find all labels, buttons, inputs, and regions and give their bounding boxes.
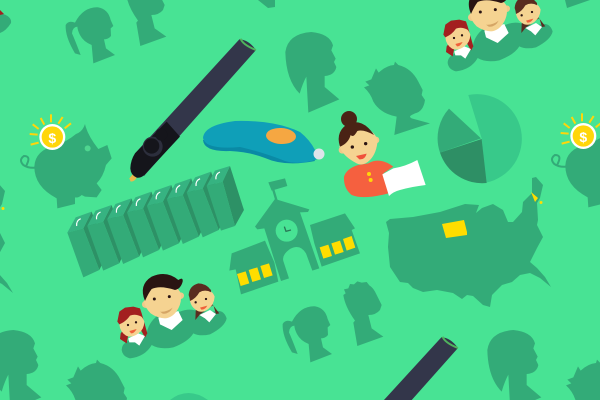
family: bottom [117, 274, 227, 358]
fragment: usa east coast left edge [0, 183, 13, 313]
right wing [310, 213, 360, 267]
silhouette: ponytail girl top [66, 7, 115, 63]
silhouette: bob woman bottom right [487, 330, 541, 400]
highlighted state [442, 220, 467, 238]
silhouette: spiky boy bottom right [566, 360, 600, 400]
silhouette: ponytail girl bottom [283, 306, 332, 362]
school building [229, 178, 360, 294]
silhouette: man bottom [343, 281, 383, 346]
open book [382, 160, 426, 196]
left wing [229, 241, 278, 294]
clock [276, 220, 298, 242]
body [344, 161, 393, 197]
row of books [67, 166, 244, 277]
head [339, 111, 379, 164]
map of the usa [386, 177, 551, 307]
silhouette: spiky boy bottom left [66, 360, 132, 400]
medium wedge [438, 109, 481, 153]
orange button [266, 127, 296, 145]
buttons [367, 172, 373, 182]
fragment: pie bottom centre [170, 393, 208, 400]
right windows [320, 236, 355, 259]
light wedge [468, 94, 522, 183]
silhouette: bob woman bottom left [0, 330, 41, 400]
piggy bank left [21, 114, 112, 208]
blue 3D pen toy [203, 121, 324, 163]
left windows [237, 263, 273, 286]
woman reading book [339, 111, 426, 197]
silhouette: man top [126, 0, 166, 46]
silhouette: spiky boy top [364, 62, 430, 135]
pie chart [438, 94, 522, 183]
family: top right [443, 0, 553, 71]
dark wedge [440, 139, 487, 183]
nozzle [314, 148, 324, 160]
silhouette fragment top centre [258, 0, 275, 8]
main building [255, 199, 319, 281]
pen: top [129, 39, 256, 182]
pen: bottom [331, 337, 458, 400]
silhouette fragment top right [565, 0, 590, 8]
piggy bank right [552, 113, 600, 207]
flag [268, 178, 287, 201]
silhouette: bob woman top [285, 32, 339, 113]
fragment: family top left [0, 10, 11, 33]
